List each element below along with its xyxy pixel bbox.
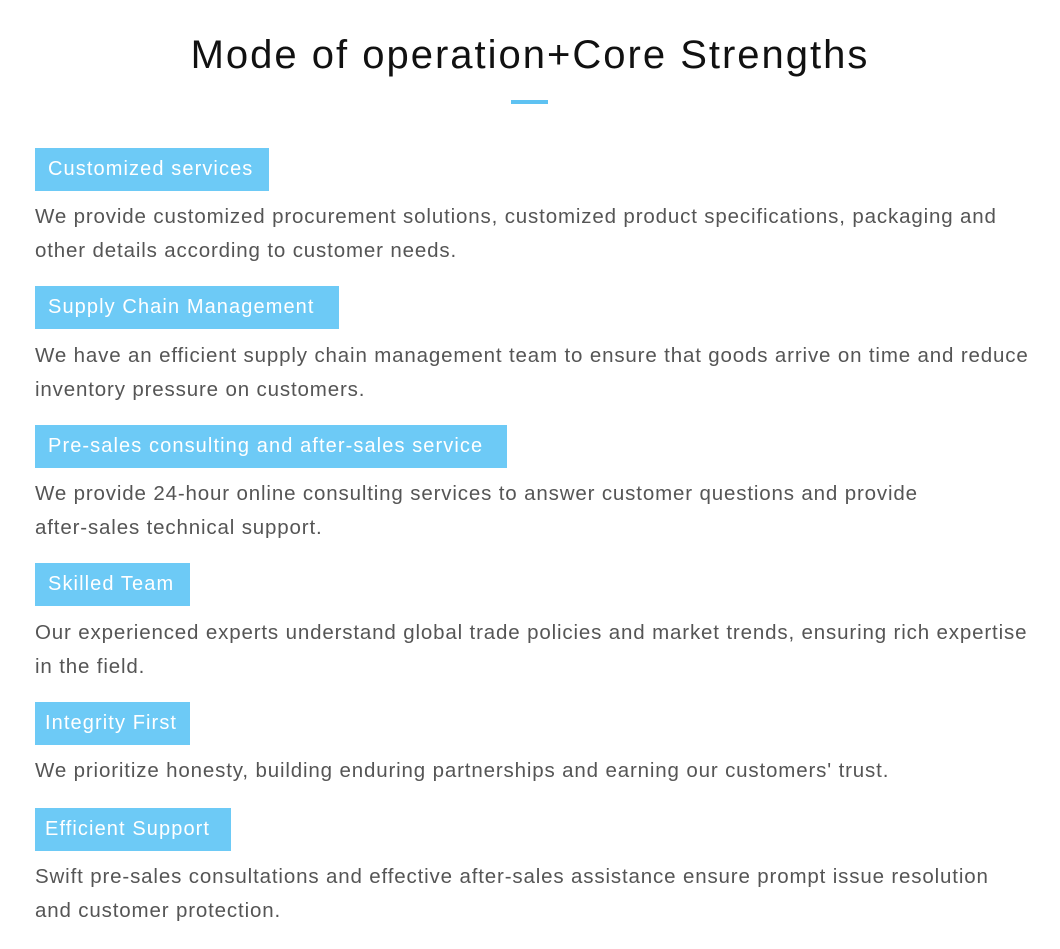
text: customized services <box>35 205 997 262</box>
text: supply chain <box>35 344 1029 401</box>
text: customized services: other details according to customer needs. <box>35 239 457 262</box>
text: skilled team: Our experienced experts understand global trade policies and market trends, ensuring rich expertise <box>35 621 1027 644</box>
text: pre-sales <box>35 482 918 539</box>
tag: Supply Chain Management <box>35 286 339 329</box>
tag: Supply Chain Management: Supply Chain Management <box>48 296 315 318</box>
tag: Integrity First: Integrity First <box>45 712 177 734</box>
text: efficient support: Swift pre-sales consultations and effective after-sales assistance ensure prompt issue resolution <box>35 865 989 888</box>
text: supply chain: We have an efficient supply chain management team to ensure that goods arrive on time and reduce <box>35 344 1029 367</box>
text: customized services: We provide customized procurement solutions, customized product specifications, packaging and <box>35 205 997 228</box>
tag: Customized services <box>35 148 269 191</box>
text: pre-sales: after-sales technical support. <box>35 516 323 539</box>
tag: Pre-sales consulting <box>35 425 507 468</box>
title: Mode of operation+Core Strengths <box>191 33 869 77</box>
text: pre-sales: We provide 24-hour online consulting services to answer customer questions and provide <box>35 482 918 505</box>
tag: Customized services: Customized services <box>48 158 253 180</box>
text: efficient support: and customer protection. <box>35 899 281 922</box>
tag: Skilled Team: Skilled Team <box>48 573 174 595</box>
text: efficient support <box>35 865 989 922</box>
tag: Integrity First <box>35 702 190 745</box>
title underline accent <box>511 100 548 104</box>
tag: Skilled Team <box>35 563 190 606</box>
tag: Efficient Support: Efficient Support <box>45 818 210 840</box>
tag: Pre-sales consulting: Pre-sales consulting and after-sales service <box>48 435 483 457</box>
tag: Efficient Support <box>35 808 231 851</box>
text: skilled team <box>35 621 1027 678</box>
text: supply chain: inventory pressure on customers. <box>35 378 365 401</box>
text: skilled team: in the field. <box>35 655 145 678</box>
text: integrity: We prioritize honesty, building enduring partnerships and earning our customers' trust. <box>35 759 889 782</box>
